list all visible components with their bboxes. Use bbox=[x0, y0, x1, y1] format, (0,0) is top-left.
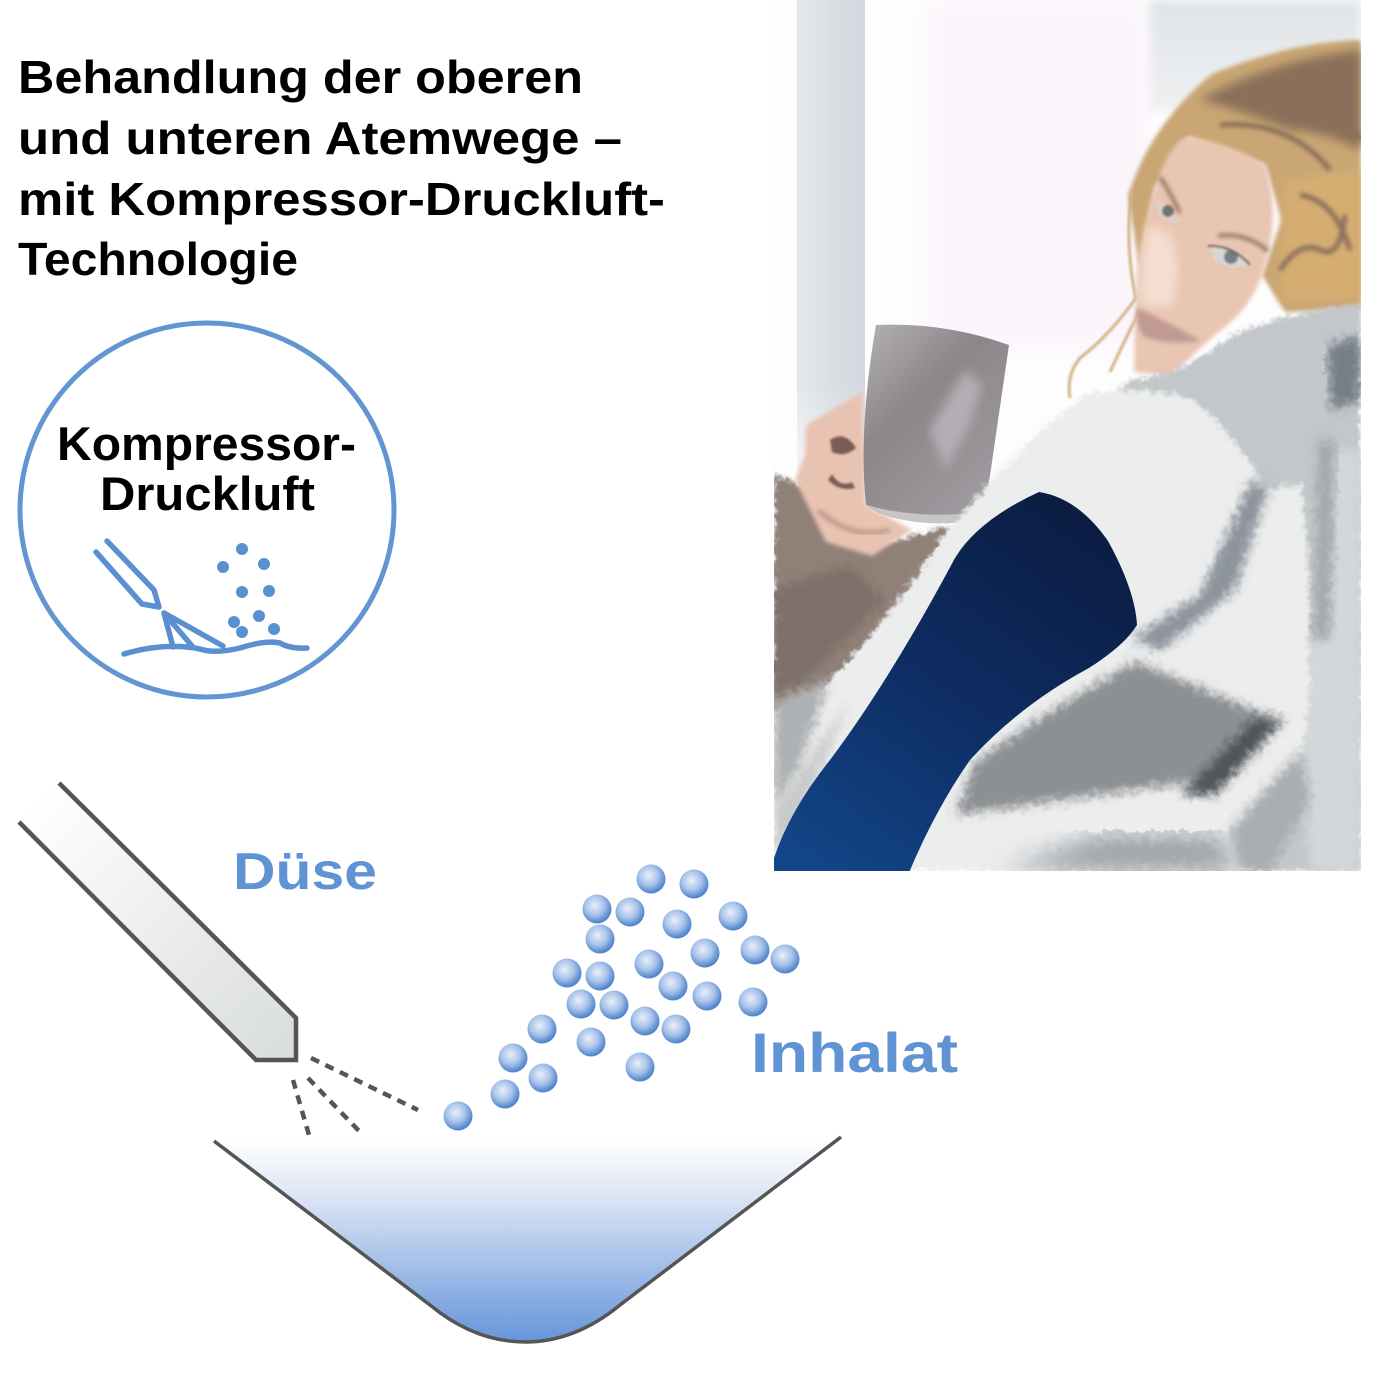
badge label: Druckluft bbox=[100, 467, 315, 520]
sweater bbox=[774, 474, 950, 712]
badge label bbox=[57, 417, 356, 520]
liquid bowl bbox=[214, 1137, 841, 1342]
hand bbox=[795, 392, 912, 556]
title bbox=[18, 51, 665, 285]
navy sleeve bbox=[774, 492, 1137, 875]
blanket bbox=[774, 303, 1361, 871]
face bbox=[1134, 137, 1273, 376]
photo: woman with mug under blanket bbox=[774, 0, 1361, 875]
icon: droplets bbox=[217, 543, 280, 638]
badge: Kompressor-Druckluft bbox=[20, 323, 394, 697]
inhalate particles bbox=[444, 864, 800, 1130]
grey band bbox=[1130, 478, 1268, 650]
stray hair strands bbox=[1069, 190, 1140, 398]
eyes bbox=[1155, 200, 1250, 268]
white sleeve fold bbox=[774, 390, 1310, 871]
icon: nozzle spraying liquid bbox=[96, 541, 307, 654]
title: und unteren Atemwege – bbox=[18, 112, 622, 164]
spray jets bbox=[293, 1058, 418, 1135]
lips bbox=[1137, 308, 1201, 343]
inner fold bbox=[955, 661, 1270, 815]
title: Technologie bbox=[18, 233, 298, 285]
title: mit Kompressor-Druckluft- bbox=[18, 173, 665, 225]
nozzle bbox=[19, 783, 296, 1060]
title: Behandlung der oberen bbox=[18, 51, 583, 103]
badge label: Kompressor- bbox=[57, 417, 356, 470]
label: Düse: Düse bbox=[233, 843, 377, 901]
label: Inhalat: Inhalat bbox=[751, 1021, 958, 1084]
mug bbox=[864, 325, 1009, 523]
hair bbox=[1128, 40, 1361, 312]
